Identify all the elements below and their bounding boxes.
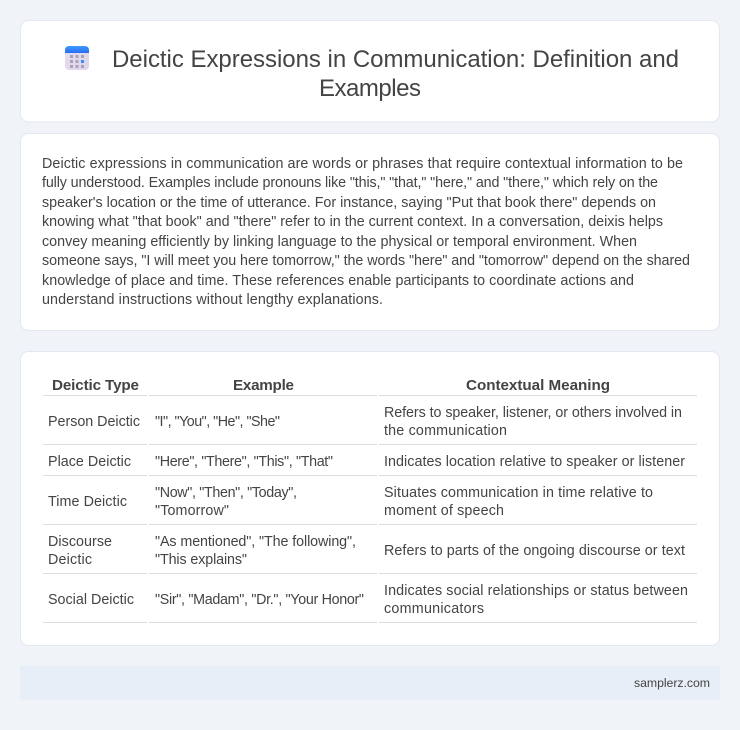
- row: time deictic: Situates communication in time relative to: [384, 485, 653, 501]
- panel: table: [20, 352, 720, 646]
- icon: calendar: [65, 46, 89, 70]
- table header: [52, 377, 610, 394]
- row: person deictic: [48, 405, 682, 439]
- row: place deictic: "Here", "There", "This", "That": [155, 454, 333, 470]
- table header: Deictic Type: [52, 377, 139, 394]
- title: Examples: [319, 75, 421, 102]
- row: social deictic: communicators: [384, 601, 484, 617]
- row: discourse deictic: Discourse: [48, 534, 112, 550]
- row: social deictic: Social Deictic: [48, 592, 134, 608]
- row: person deictic: "I", "You", "He", "She": [155, 414, 280, 430]
- row: time deictic: Time Deictic: [48, 494, 127, 510]
- footer: samplerz.com: [634, 676, 710, 690]
- row: social deictic: Indicates social relationships or status between: [384, 583, 688, 599]
- row: time deictic: "Now", "Then", "Today",: [155, 485, 297, 501]
- text block: description paragraph: speaker's location or the time of utterance. For instance, saying "Put that book there" depends on: [42, 195, 656, 211]
- row: time deictic: moment of speech: [384, 503, 504, 519]
- row: person deictic: Person Deictic: [48, 414, 140, 430]
- row: person deictic: the communication: [384, 423, 507, 439]
- panel: title card: [20, 20, 720, 122]
- row: discourse deictic: "This explains": [155, 552, 247, 568]
- text block: description paragraph: Deictic expressions in communication are words or phrases that require contextual information to be: [42, 156, 683, 172]
- row: discourse deictic: Refers to parts of the ongoing discourse or text: [384, 543, 685, 559]
- row: social deictic: "Sir", "Madam", "Dr.", "Your Honor": [155, 592, 364, 608]
- row: discourse deictic: [48, 534, 685, 568]
- text block: description paragraph: [42, 156, 690, 308]
- text block: description paragraph: someone says, "I will meet you here tomorrow," the words "here" and "tomorrow" depend on the shared: [42, 253, 690, 269]
- table header: Example: [233, 377, 294, 394]
- row: place deictic: Indicates location relative to speaker or listener: [384, 454, 685, 470]
- text block: description paragraph: understand instructions without lengthy explanations.: [42, 292, 383, 308]
- row: place deictic: [48, 454, 685, 470]
- row: place deictic: Place Deictic: [48, 454, 131, 470]
- title: Deictic Expressions in Communication: Definition and: [112, 46, 679, 73]
- row: discourse deictic: Deictic: [48, 552, 92, 568]
- text block: description paragraph: convey meaning efficiently by linking language to the physical or temporal environment. When: [42, 234, 637, 250]
- row: social deictic: [48, 583, 688, 617]
- panel: description: [20, 134, 720, 330]
- text block: description paragraph: knowing what "that book" and "there" refer to in the current context. In a conversation, deixis helps: [42, 214, 663, 230]
- title: [112, 46, 679, 102]
- row: discourse deictic: "As mentioned", "The following",: [155, 534, 356, 550]
- row: time deictic: "Tomorrow": [155, 503, 229, 519]
- row: time deictic: [48, 485, 653, 519]
- text block: description paragraph: knowledge of place and time. These references enable participants to coordinate actions and: [42, 273, 634, 289]
- row: person deictic: Refers to speaker, listener, or others involved in: [384, 405, 682, 421]
- text block: description paragraph: fully understood. Examples include pronouns like "this," "that," "here," and "there," which rely on the: [42, 175, 658, 191]
- footer: [20, 666, 720, 700]
- table header: Contextual Meaning: [466, 377, 610, 394]
